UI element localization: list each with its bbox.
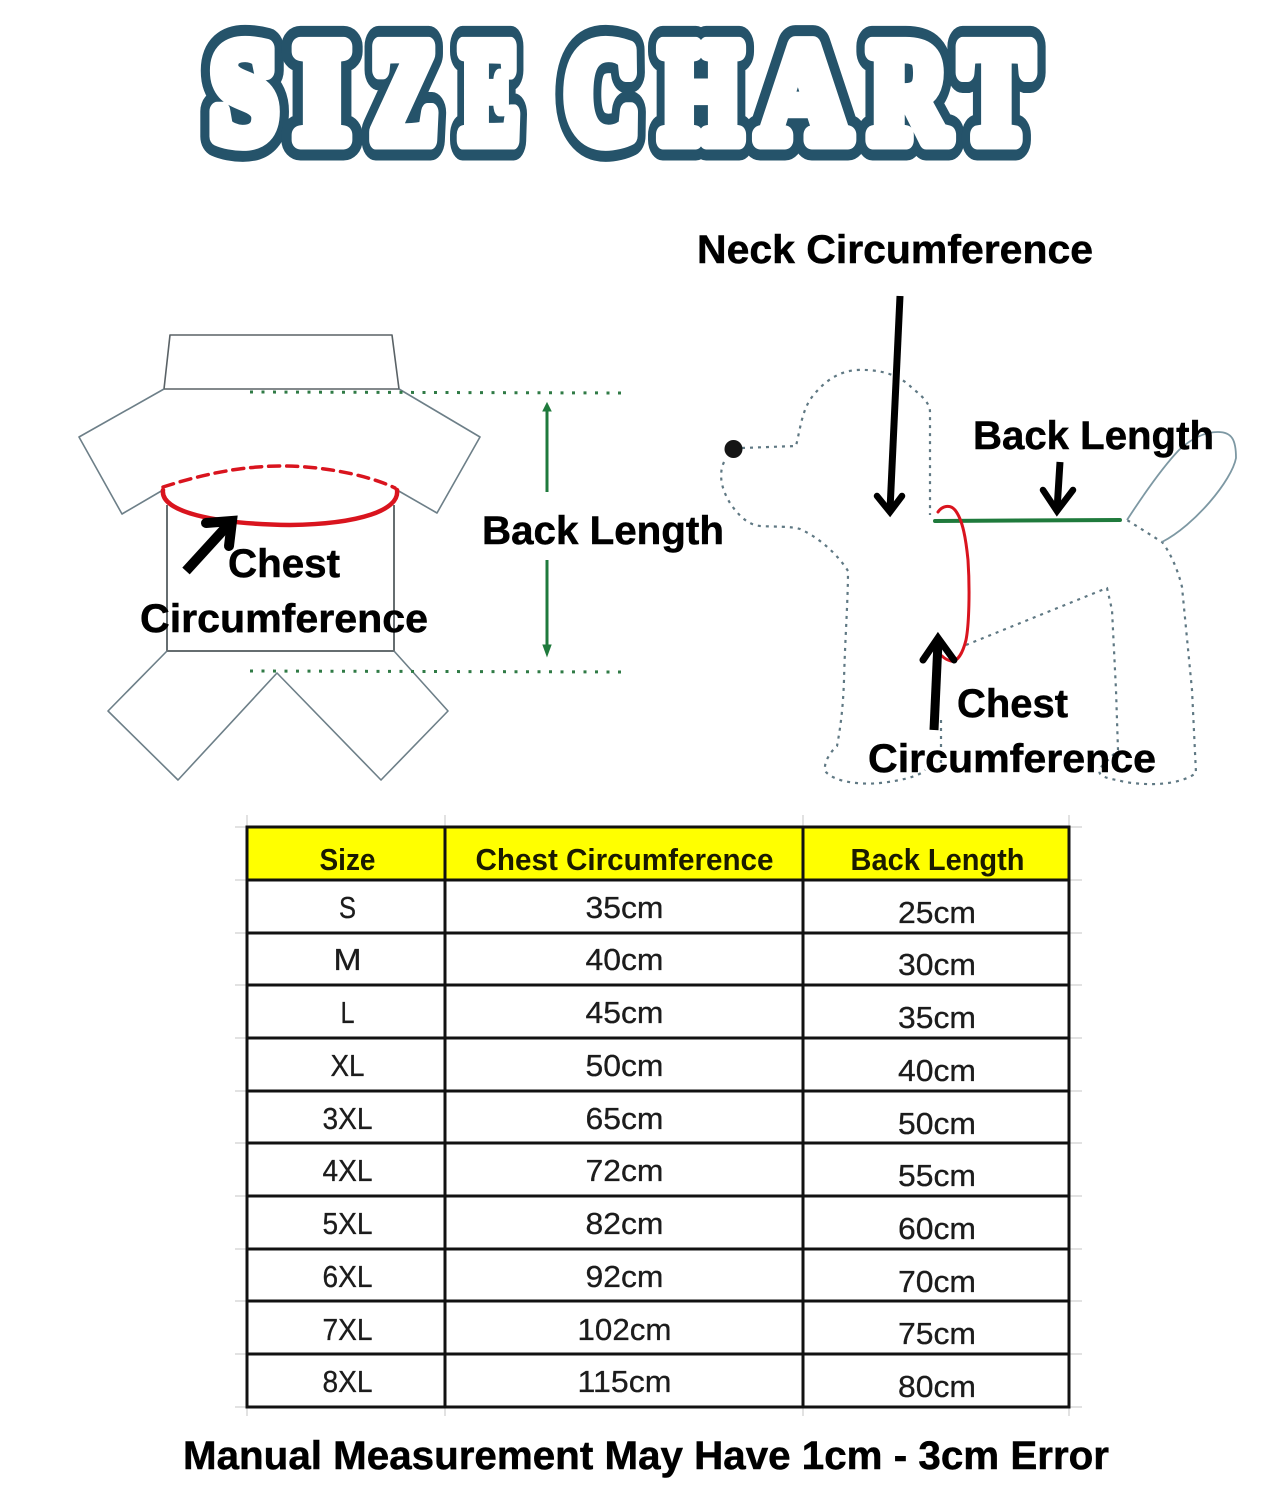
row 3XL xyxy=(322,1101,976,1141)
row 4XL xyxy=(322,1153,976,1193)
title: SIZE CHART: I xyxy=(296,13,348,171)
label: chest circumference right: Circumference xyxy=(868,737,1156,781)
title: SIZE CHART: C xyxy=(565,13,639,171)
spreadsheet grid lines xyxy=(235,815,1082,1416)
garment outline xyxy=(79,335,480,780)
row S: S xyxy=(339,890,356,925)
row 6XL: 6XL xyxy=(322,1259,372,1294)
row 7XL: 102cm xyxy=(578,1312,672,1347)
row 4XL: 72cm xyxy=(586,1153,664,1188)
row 7XL: 75cm xyxy=(898,1316,976,1351)
label: back length right: Back Length xyxy=(973,414,1214,458)
green back length line xyxy=(935,520,1120,521)
title: SIZE CHART: Z xyxy=(371,13,437,171)
dog tail xyxy=(1127,432,1236,542)
label: chest circumference left xyxy=(140,542,428,641)
row 7XL: 7XL xyxy=(322,1312,372,1347)
row 5XL: 5XL xyxy=(322,1206,372,1241)
title: SIZE CHART: R xyxy=(870,13,949,171)
footer note: Manual Measurement May Have 1cm - 3cm Error xyxy=(183,1434,1109,1478)
row M: M xyxy=(334,942,362,977)
row 5XL: 82cm xyxy=(586,1206,664,1241)
row 6XL: 70cm xyxy=(898,1264,976,1299)
title: SIZE CHART: C xyxy=(565,13,639,171)
row M: 40cm xyxy=(586,942,664,977)
dog outline xyxy=(721,370,1196,784)
table header row: Back Length xyxy=(850,842,1024,877)
row XL: XL xyxy=(330,1048,364,1083)
title: SIZE CHART: H xyxy=(661,13,741,171)
label: chest circumference right xyxy=(868,682,1156,781)
row S: 25cm xyxy=(898,895,976,930)
dog nose xyxy=(724,440,742,458)
icon: chest arrow xyxy=(923,638,954,730)
table header row: Chest Circumference xyxy=(476,842,774,877)
row 8XL: 8XL xyxy=(322,1364,372,1399)
row 8XL: 80cm xyxy=(898,1369,976,1404)
row XL: 50cm xyxy=(586,1048,664,1083)
title: SIZE CHART: T xyxy=(961,13,1032,171)
icon: neck arrow xyxy=(877,296,902,512)
red chest line xyxy=(938,506,969,661)
green dotted guide lines xyxy=(250,392,622,672)
panel: garment diagram xyxy=(79,335,622,780)
label: chest circumference left: Chest xyxy=(228,542,340,586)
title: SIZE CHART: E xyxy=(461,13,519,171)
row 4XL: 55cm xyxy=(898,1158,976,1193)
title: SIZE CHART: Z xyxy=(371,13,437,171)
row L: 45cm xyxy=(586,995,664,1030)
table header row xyxy=(320,842,1024,877)
title: SIZE CHART: T xyxy=(961,13,1032,171)
row L: L xyxy=(340,995,354,1030)
table borders xyxy=(247,827,1069,1407)
label: chest circumference right: Chest xyxy=(957,682,1068,726)
table header row: Size xyxy=(320,842,376,877)
row 3XL: 3XL xyxy=(322,1101,372,1136)
row M: 30cm xyxy=(898,947,976,982)
back length double arrow xyxy=(543,403,551,656)
row L: 35cm xyxy=(898,1000,976,1035)
title: SIZE CHART: A xyxy=(759,13,849,171)
row 5XL xyxy=(322,1206,976,1246)
title: SIZE CHART: E xyxy=(461,13,519,171)
row XL: 40cm xyxy=(898,1053,976,1088)
row 8XL: 115cm xyxy=(578,1364,672,1399)
row S xyxy=(339,890,976,930)
title: SIZE CHART: R xyxy=(870,13,949,171)
row 3XL: 65cm xyxy=(586,1101,664,1136)
label: chest circumference left: Circumference xyxy=(140,597,428,641)
row XL xyxy=(330,1048,976,1088)
row 6XL: 92cm xyxy=(586,1259,664,1294)
red chest circumference ring xyxy=(163,466,397,525)
panel: dog diagram xyxy=(721,296,1236,784)
row 6XL xyxy=(322,1259,976,1299)
title: SIZE CHART xyxy=(211,13,1032,171)
label: back length left: Back Length xyxy=(482,509,724,553)
table header background xyxy=(247,827,1069,880)
title: SIZE CHART: S xyxy=(211,13,277,171)
icon: back length arrow xyxy=(1043,462,1073,511)
row 8XL xyxy=(322,1364,976,1404)
row S: 35cm xyxy=(586,890,664,925)
icon: arrow to chest ring xyxy=(186,521,232,571)
title: SIZE CHART: I xyxy=(296,13,348,171)
row 7XL xyxy=(322,1312,976,1351)
row 5XL: 60cm xyxy=(898,1211,976,1246)
size table xyxy=(235,815,1082,1416)
row 3XL: 50cm xyxy=(898,1106,976,1141)
title: SIZE CHART: H xyxy=(661,13,741,171)
row 4XL: 4XL xyxy=(322,1153,372,1188)
title: SIZE CHART: S xyxy=(211,13,277,171)
label: neck circumference: Neck Circumference xyxy=(697,228,1093,272)
row M xyxy=(334,942,976,982)
row L xyxy=(340,995,976,1035)
title: SIZE CHART: A xyxy=(759,13,849,171)
